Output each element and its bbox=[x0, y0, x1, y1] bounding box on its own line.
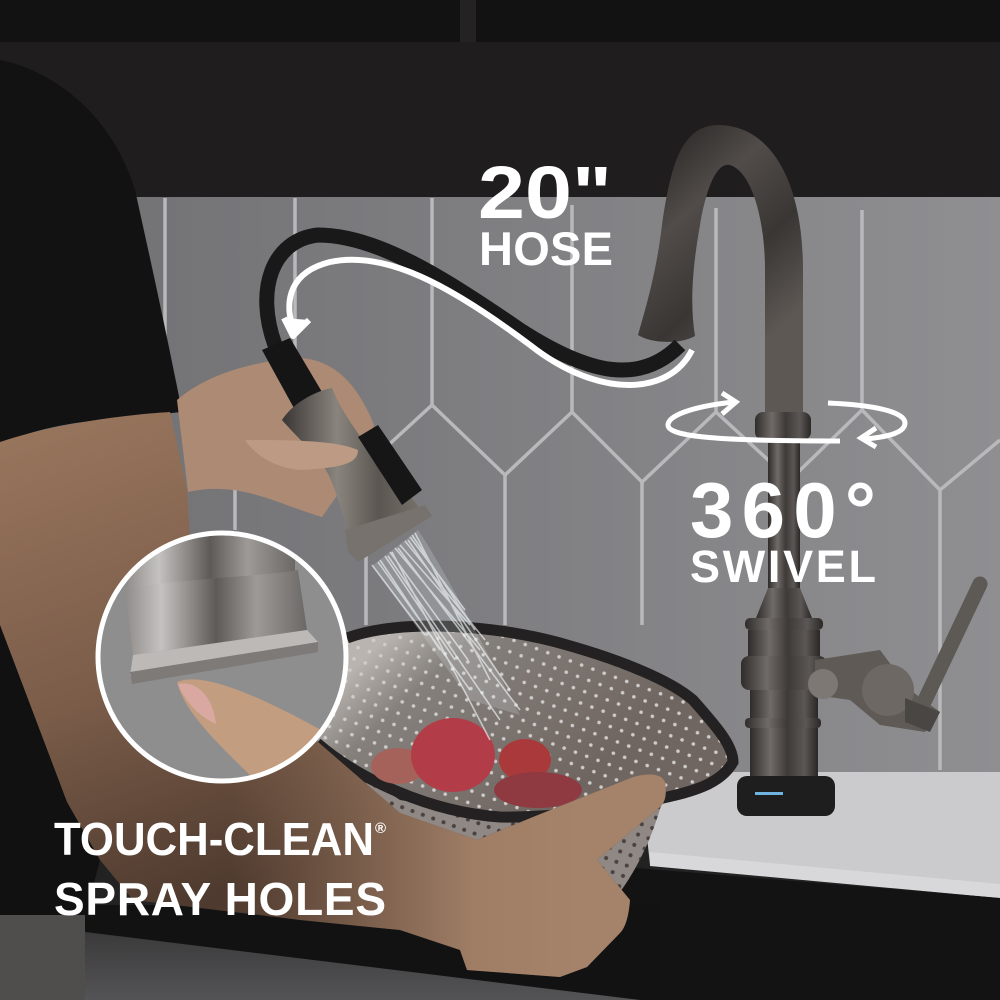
forearm and hand holding colander bbox=[0, 412, 666, 977]
label: touch-clean spray holes: ® bbox=[375, 820, 386, 837]
label: touch-clean spray holes bbox=[54, 813, 386, 925]
label: 20 inch hose bbox=[478, 151, 613, 275]
faucet handle bbox=[815, 650, 940, 732]
label: 20 inch hose: HOSE bbox=[479, 222, 613, 275]
spray water bbox=[372, 530, 520, 740]
faucet base column bbox=[755, 412, 811, 440]
background: dark upper cabinets bbox=[0, 0, 1000, 197]
faucet bbox=[638, 125, 980, 816]
hose bbox=[267, 235, 680, 370]
label: 20 inch hose: 20" bbox=[478, 151, 612, 234]
label: 360 swivel: SWIVEL bbox=[690, 541, 876, 592]
faucet neck bbox=[638, 125, 803, 412]
label: 360 swivel bbox=[690, 466, 876, 592]
shirt lower bbox=[0, 620, 100, 918]
label: touch-clean spray holes: SPRAY HOLES bbox=[54, 873, 386, 925]
arrows: swivel bbox=[668, 393, 905, 447]
towel bbox=[0, 915, 85, 1000]
arrow: hose bbox=[284, 260, 692, 385]
callout: spray holes detail circle bbox=[98, 500, 346, 785]
background: tile wall bbox=[0, 190, 1000, 790]
counter and lower cabinet bbox=[0, 772, 1000, 1000]
colander bbox=[317, 626, 733, 892]
potatoes bbox=[371, 748, 425, 784]
shirt bbox=[0, 60, 182, 445]
label: touch-clean spray holes: TOUCH-CLEAN bbox=[54, 813, 374, 865]
hand holding sprayer bbox=[177, 358, 374, 517]
finger on sprayer bbox=[245, 440, 358, 470]
sprayer head bbox=[262, 338, 432, 562]
label: 360 swivel: 360° bbox=[690, 466, 876, 554]
